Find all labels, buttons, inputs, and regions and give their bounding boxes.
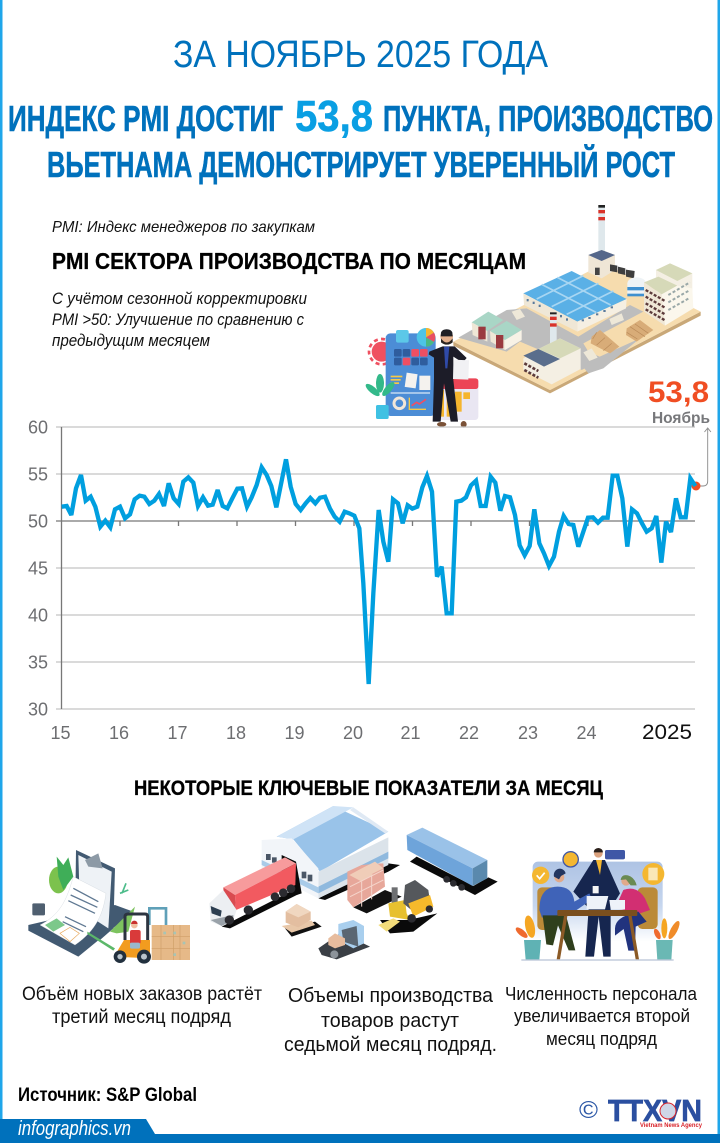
globe mark — [660, 1103, 676, 1119]
title — [8, 34, 713, 185]
tablet — [386, 333, 436, 416]
red truck — [222, 887, 300, 928]
caption: employment: увеличивается второй — [514, 1006, 690, 1026]
callout: latest value — [648, 376, 710, 427]
conveyor — [318, 933, 370, 959]
blue semitrailer — [410, 857, 498, 895]
racks of boxes — [353, 890, 402, 913]
y-axis labels: 55 — [28, 464, 48, 484]
site name: infographics.vn — [18, 1118, 131, 1140]
y-axis labels: 50 — [28, 512, 48, 532]
forklift — [152, 925, 190, 960]
vans — [512, 309, 525, 320]
PMI definition note: PMI: Индекс менеджеров по закупкам — [52, 219, 315, 236]
y-axis labels: 45 — [28, 558, 48, 578]
chart notes: С учётом сезонной корректировки — [52, 290, 307, 308]
main hall — [523, 271, 627, 322]
title line: date: ЗА НОЯБРЬ 2025 ГОДА — [173, 34, 549, 76]
headline line 1 start: ИНДЕКС PMI ДОСТИГ — [8, 98, 283, 139]
plants — [524, 940, 541, 960]
forklift yellow — [380, 913, 437, 933]
pie — [417, 328, 435, 347]
caption: production volume: товаров растут — [321, 1009, 460, 1032]
PMI line — [62, 459, 695, 684]
x-axis labels: 24 — [576, 723, 597, 743]
x-axis labels: 15 — [50, 723, 71, 743]
tall man — [573, 860, 620, 957]
chimney main — [598, 205, 605, 255]
x-axis labels: 20 — [343, 723, 363, 743]
grid lines — [56, 427, 695, 709]
caption: production volume: седьмой месяц подряд. — [284, 1033, 497, 1056]
x-axis labels: 16 — [109, 723, 129, 743]
y-axis labels — [28, 418, 48, 720]
agency wordmark: TTXVN — [608, 1093, 702, 1128]
chart notes — [52, 290, 307, 350]
footer bar — [0, 1118, 720, 1143]
x-axis labels — [50, 723, 597, 743]
desk — [557, 910, 637, 916]
man on left — [539, 887, 592, 918]
y-axis labels: 30 — [28, 700, 48, 720]
pallet boxes — [285, 922, 322, 937]
chart heading: PMI СЕКТОРА ПРОИЗВОДСТВА ПО МЕСЯЦАМ — [52, 248, 526, 274]
chart notes: предыдущим месяцем — [52, 332, 210, 350]
right tower — [656, 263, 692, 317]
x-axis labels: 18 — [226, 723, 246, 743]
caption: new orders: Объём новых заказов растёт — [22, 984, 262, 1005]
caption: employment: Численность персонала — [505, 984, 698, 1004]
callout connector arrow — [699, 428, 711, 486]
caption: employment — [505, 984, 698, 1049]
bubbles — [532, 867, 549, 884]
caption: production volume — [284, 984, 497, 1056]
logo: TTXVN — [579, 1093, 703, 1129]
x-axis labels: 19 — [284, 723, 305, 743]
crates — [626, 320, 653, 342]
caption: new orders — [22, 984, 262, 1028]
agency tagline: Vietnam News Agency — [640, 1123, 703, 1129]
plant — [376, 374, 384, 393]
icon: office team meeting — [514, 848, 682, 961]
left sheds — [472, 312, 503, 331]
gear — [372, 342, 392, 362]
y-axis labels: 35 — [28, 652, 48, 672]
icon: warehouse and logistics — [209, 806, 498, 959]
y-axis labels: 60 — [28, 418, 48, 438]
x-axis labels: 17 — [167, 723, 188, 743]
warehouse — [318, 863, 400, 900]
section heading: НЕКОТОРЫЕ КЛЮЧЕВЫЕ ПОКАЗАТЕЛИ ЗА МЕСЯЦ — [134, 777, 604, 800]
copyright mark: © — [579, 1097, 598, 1124]
line chart: PMI by month — [28, 418, 711, 744]
icon: isometric factory — [453, 205, 701, 393]
x-axis labels: 23 — [518, 723, 538, 743]
callout: latest value: 53,8 — [648, 376, 709, 409]
woman on right — [615, 889, 650, 915]
front building with chimney — [550, 315, 557, 345]
year label 2025: 2025 — [642, 721, 692, 744]
x-axis labels: 22 — [459, 723, 479, 743]
headline value: 53,8 — [295, 92, 373, 141]
caption: new orders: третий месяц подряд — [52, 1007, 231, 1028]
marker: latest value — [692, 482, 700, 490]
caption: employment: месяц подряд — [546, 1029, 657, 1049]
chart notes: PMI >50: Улучшение по сравнению с — [52, 311, 305, 329]
x-axis labels: 21 — [400, 723, 421, 743]
callout: latest value: Ноябрь — [652, 410, 710, 427]
man — [429, 346, 467, 422]
caption: production volume: Объемы производства — [288, 984, 494, 1007]
source: Источник: S&P Global — [18, 1085, 197, 1106]
icon: businessman with dashboard — [364, 328, 478, 428]
icon: clipboard and forklift — [28, 850, 190, 964]
y-axis labels: 40 — [28, 606, 48, 626]
calendar — [435, 378, 478, 420]
